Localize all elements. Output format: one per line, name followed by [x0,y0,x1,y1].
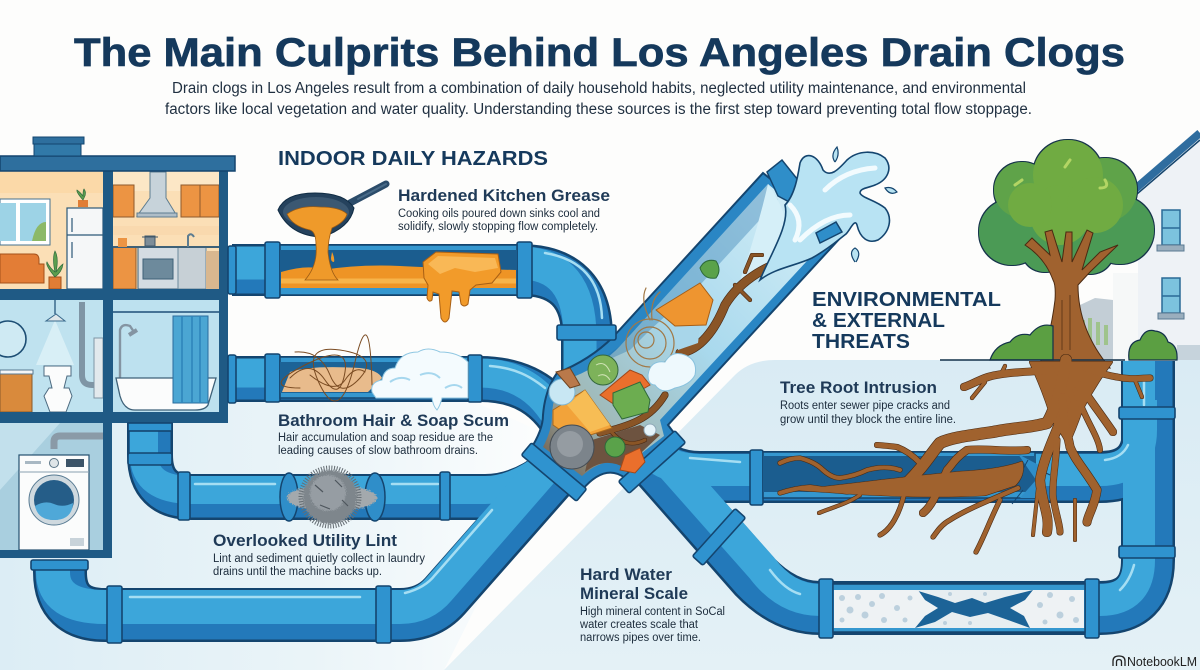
label: bathroom hair and soap scum [278,411,509,457]
soap blob left [549,379,575,405]
small white [644,424,656,436]
pipe flanges [31,242,1175,643]
tree roots [780,360,1150,552]
tree canopy [979,140,1154,274]
soap foam [372,349,468,410]
green bit [700,260,719,278]
room: bathtub [113,300,219,412]
label: hard water mineral scale: High mineral content in SoCal [580,606,725,618]
heading: environmental and external threats: & EXTERNAL [812,309,945,332]
label: tree root intrusion: Roots enter sewer pipe cracks and [780,400,950,412]
blocked junction pipe window [530,173,842,490]
label: hardened kitchen grease: Hardened Kitchen Grease [398,186,610,205]
pipe: kitchen drain [232,253,602,395]
heading: environmental and external threats: ENVIRONMENTAL [812,288,1001,311]
room: kitchen [113,171,219,289]
pipes: laundry drain and main lower return [53,420,556,615]
pipes: root branch and hard water branch [640,361,1148,608]
label: overlooked utility lint: Overlooked Utility Lint [213,531,397,550]
room: living room [0,171,103,289]
house frame [0,171,228,558]
intro paragraph [165,80,1032,118]
label: tree root intrusion: grow until they block the entire line. [780,414,956,426]
ground left [0,400,560,670]
pipe: bathroom drain [232,366,570,435]
root pipe window [763,452,1050,504]
lint clog [280,468,385,526]
label: hard water mineral scale: narrows pipes over time. [580,632,701,644]
grease block and drips [423,252,501,322]
small green [605,437,625,457]
bushes [990,325,1053,360]
dark sludge [585,425,660,472]
brown chip [556,368,580,388]
house on the right [1080,133,1200,360]
tree [940,140,1177,368]
intro paragraph: Drain clogs in Los Angeles result from a combination of daily household habits, neglected utility maintenance, and environmental [172,80,1026,97]
label: hardened kitchen grease: solidify, slowly stopping flow completely. [398,221,598,233]
carrot chunk [600,370,650,405]
label: bathroom hair and soap scum: Bathroom Hair & Soap Scum [278,411,509,430]
bathroom pipe window with hair and soap [280,335,468,410]
heading: indoor daily hazards: INDOOR DAILY HAZARDS [278,147,548,170]
lint ball [550,425,594,469]
heading: environmental and external threats [812,288,1001,353]
kitchen pipe window with grease [280,245,517,322]
green cube [613,382,650,419]
intro paragraph: factors like local vegetation and water quality. Understanding these sources is the first step toward preventing total flow stoppage. [165,101,1032,118]
label: overlooked utility lint: Lint and sediment quietly collect in laundry [213,553,425,565]
cabbage [588,355,618,385]
clog debris [549,255,800,473]
roots in clog [600,255,800,443]
label: hard water mineral scale: Hard Water [580,565,672,584]
watermark: NotebookLM [1127,654,1197,669]
label: hardened kitchen grease: Cooking oils poured down sinks cool and [398,208,600,220]
label: hard water mineral scale: water creates scale that [579,619,699,631]
label: hard water mineral scale [579,565,725,644]
label: overlooked utility lint: drains until the machine backs up. [213,566,382,578]
ground right [444,360,1200,670]
icon: frying pan pouring grease [278,184,386,280]
hair ball [626,288,674,367]
tree trunk [1025,230,1118,368]
small orange [620,448,645,473]
label: overlooked utility lint [213,531,425,578]
label: bathroom hair and soap scum: leading causes of slow bathroom drains. [278,445,478,457]
title: The Main Culprits Behind Los Angeles Drain Clogs [74,31,1125,75]
label: bathroom hair and soap scum: Hair accumulation and soap residue are the [278,432,493,444]
label: hardened kitchen grease [398,186,610,233]
soap chunk [648,354,696,391]
room: laundry and washer [0,423,103,550]
label: tree root intrusion: Tree Root Intrusion [780,378,937,397]
heading: environmental and external threats: THREATS [812,330,910,353]
blue ice chunk [672,326,700,350]
ground line [940,359,1125,361]
orange block [656,283,713,326]
hard water pipe window with scale [833,584,1085,632]
label: tree root intrusion [780,378,956,426]
water splash [760,147,897,280]
label: hard water mineral scale: Mineral Scale [580,584,688,603]
house cutaway [0,137,235,558]
yellow cube [553,390,612,440]
room: vanity and toilet [0,300,103,412]
